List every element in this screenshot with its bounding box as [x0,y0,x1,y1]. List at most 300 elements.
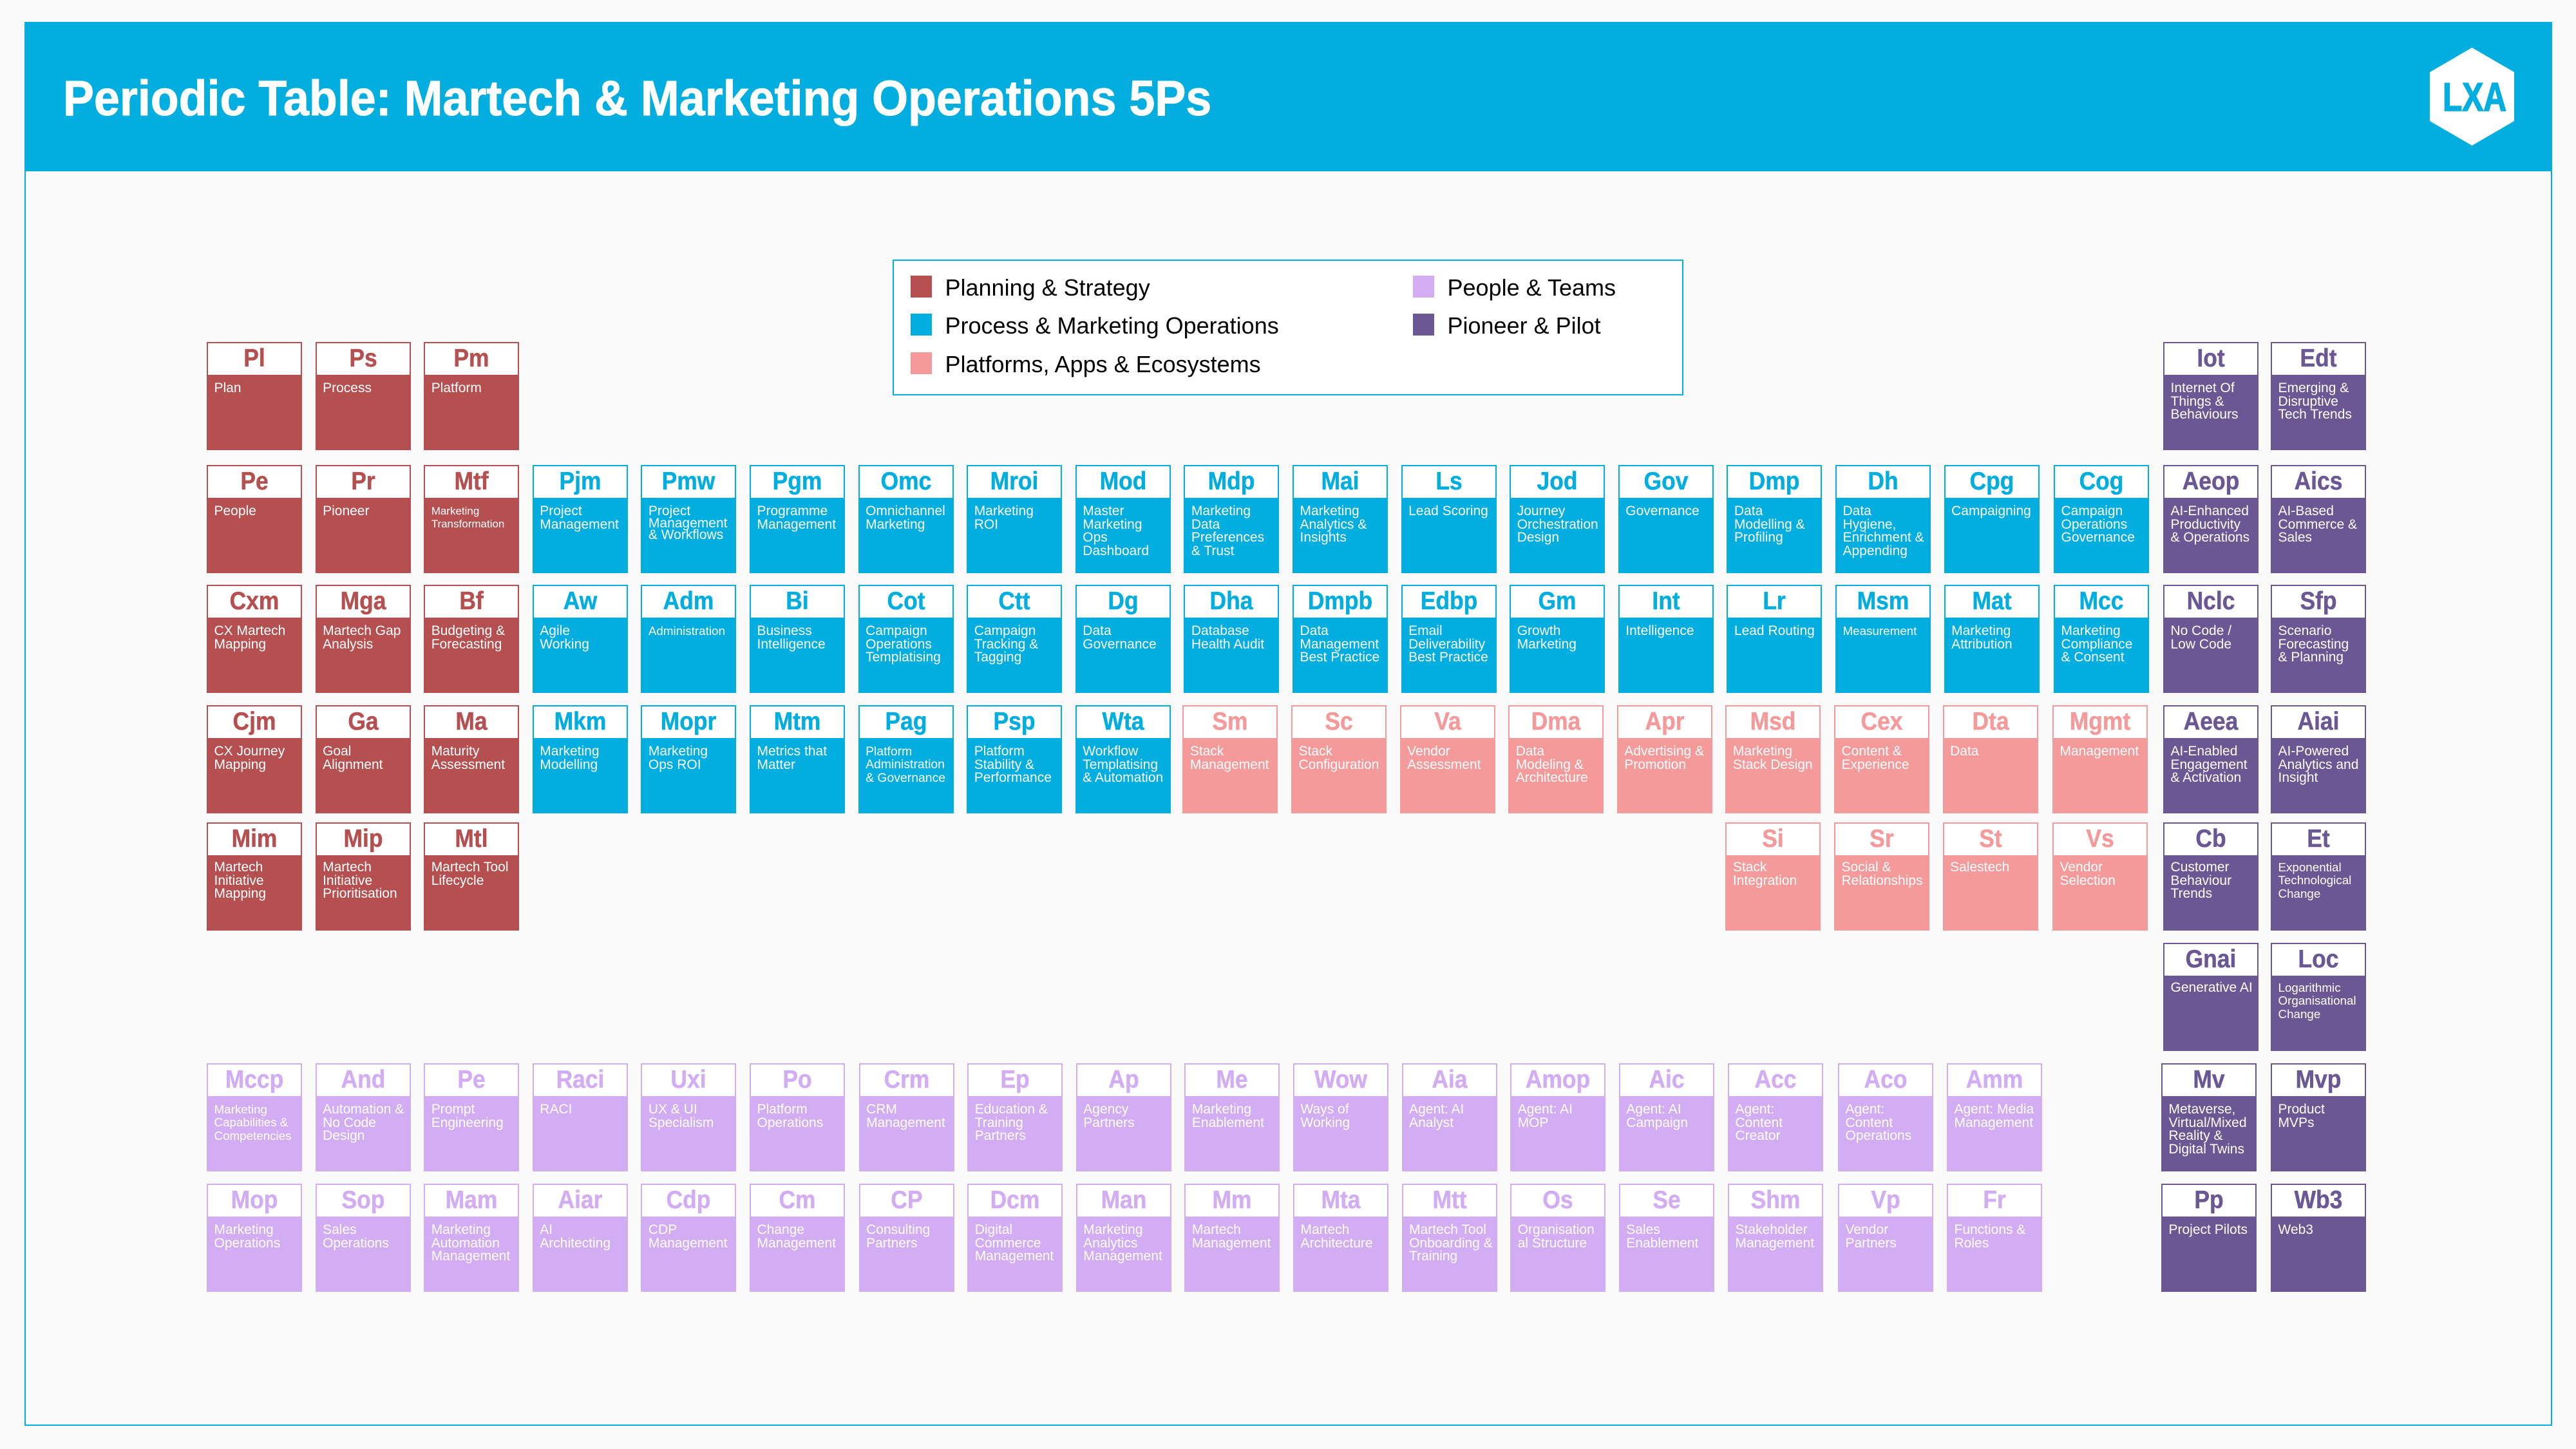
element: Cm: Change [757,1222,804,1237]
element: Mdp [1184,465,1279,573]
legend item: Pioneer & Pilot [1413,312,1601,339]
element: Sfp [2271,585,2366,693]
element: Mccp [207,1063,302,1171]
element: Sfp: Forecasting [2278,636,2349,652]
element: Cb: Cb [2195,825,2226,853]
element: Dmp: Modelling & [1734,516,1805,532]
element: Os: Os [1543,1186,1573,1214]
element: Mta: Architecture [1301,1235,1373,1251]
element: Mtt: Training [1409,1249,1457,1264]
element: Dcm: Commerce [975,1235,1041,1251]
element: Crm: Crm [884,1066,929,1094]
element: Loc [2271,943,2366,1051]
element: Po: Platform [757,1102,808,1117]
element: Mip: Mip [343,825,383,853]
element: Nclc: No Code / [2170,623,2231,638]
element: Mv: Mv [2193,1066,2225,1094]
element: Adm: Adm [663,587,714,615]
element: Omc: Omc [880,468,931,495]
element: Pm [424,342,519,450]
element: Aiai: Aiai [2298,708,2339,735]
element: Raci [533,1063,628,1171]
legend panel: Pioneer & Pilot [1448,312,1601,339]
element: Mip: Initiative [323,873,372,887]
element: Mai: Analytics & [1300,516,1367,532]
element: Dma: Modeling & [1516,757,1584,772]
element: Mtf: Mtf [455,468,489,495]
element: Dmpb: Data [1300,623,1329,638]
element: Cot: Operations [866,636,932,652]
legend item: Planning & Strategy [911,274,1150,300]
element: Aia [1402,1063,1497,1171]
element: Sm [1182,705,1278,813]
element: Dta: Dta [1972,708,2009,735]
element: Shm: Shm [1751,1186,1800,1214]
element: Sm: Sm [1213,708,1248,735]
element: Dta [1943,705,2038,813]
element: Sfp: Sfp [2300,587,2337,615]
element: Dmp [1727,465,1822,573]
element: Dha: Dha [1210,587,1253,615]
element: Pl: Plan [214,381,242,395]
element: Dg: Data [1083,623,1112,638]
element: Mopr: Marketing [649,744,708,759]
element: Mcc: & Consent [2061,650,2125,665]
element: Mvp: MVPs [2278,1115,2315,1130]
element: Dha: Database [1191,623,1249,638]
element: Dma: Architecture [1516,770,1588,785]
element: Ctt: Tagging [974,650,1021,665]
element: Mtm: Mtm [774,708,820,735]
element: Loc: Change [2278,1007,2320,1020]
element: Shm [1728,1184,1823,1292]
element: Ma: Maturity [431,744,479,759]
element: Ma: Assessment [431,757,505,772]
element: And [316,1063,411,1171]
element: Mccp: Marketing [214,1103,267,1115]
element: Dma [1508,705,1604,813]
element: Pmw: & Workflows [649,527,723,542]
element: Ap: Ap [1108,1066,1139,1094]
element: Pgm [750,465,845,573]
element: Crm: CRM [866,1102,897,1117]
element: Acc: Creator [1735,1128,1781,1143]
element: Msm: Measurement [1843,623,1917,638]
element: Wb3 [2271,1184,2366,1292]
element: Gov: Gov [1643,468,1688,495]
element: Edt: Disruptive [2278,394,2338,408]
element: Acc: Agent: [1735,1102,1774,1117]
element: Si: Si [1763,825,1784,853]
element: Psp [967,705,1062,813]
element: Loc: Organisational [2278,994,2356,1007]
element: Pgm: Management [757,516,836,532]
element: Edbp: Best Practice [1408,650,1488,665]
element: Cb: Customer [2170,860,2230,875]
element: CP [859,1184,954,1292]
element: Dcm: Digital [975,1222,1012,1237]
legend panel: People & Teams [1448,274,1616,300]
element: Pp [2161,1184,2257,1292]
element: Dmpb [1293,585,1388,693]
element: Man: Man [1101,1186,1146,1214]
element: Uxi: Specialism [649,1115,714,1130]
element: Pmw [641,465,736,573]
title: Periodic Table: Martech & Marketing Operations 5Ps [63,71,1211,126]
legend panel: Platforms, Apps & Ecosystems [945,350,1261,377]
element: Mga: Analysis [323,636,373,652]
element: Iot: Behaviours [2170,407,2239,422]
element: Sop [316,1184,411,1292]
element: Mv: Digital Twins [2169,1141,2244,1157]
element: Pm: Pm [454,345,489,372]
element: Lr: Lead Routing [1734,623,1815,638]
element: Msm: Msm [1857,587,1909,615]
element: Cex: Content & [1842,744,1902,759]
element: Apr [1617,705,1712,813]
element: Mtf: Transformation [431,518,504,529]
element: Wta: Workflow [1083,744,1138,759]
element: Adm: Administration [649,623,725,638]
element: Nclc: Low Code [2170,636,2231,652]
element: Iot: Internet Of [2170,381,2235,395]
element: Pjm [533,465,628,573]
element: Va: Va [1434,708,1461,735]
element: Vp: Partners [1846,1235,1897,1251]
element: Dma: Dma [1531,708,1581,735]
element: Msd: Stack Design [1733,757,1813,772]
element: Mtl [424,822,519,931]
element: Sc: Stack [1298,744,1332,759]
element: Ma: Ma [456,708,488,735]
element: Ma [424,705,519,813]
element: Msm [1835,585,1931,693]
element: Pmw: Management [649,515,727,531]
element: Sr: Relationships [1842,873,1923,887]
element: Edt [2271,342,2366,450]
element: Mat [1944,585,2040,693]
element: Dh: Dh [1868,468,1899,495]
element: Mkm: Modelling [540,757,598,772]
element: CP: Partners [866,1235,917,1251]
element: Mm: Martech [1192,1222,1241,1237]
element: St [1943,822,2038,931]
element: Cpg [1944,465,2040,573]
element: Bf: Budgeting & [431,623,505,638]
element: Mroi: Marketing [974,504,1034,518]
element: Aia: Agent: AI [1409,1102,1464,1117]
element: Ctt: Tracking & [974,636,1038,652]
element: CP: Consulting [866,1222,930,1237]
element: Mim [207,822,302,931]
element: Vs: Vendor [2060,860,2103,875]
element: Ga [316,705,411,813]
element: Mod: Mod [1099,468,1146,495]
element: Sc: Configuration [1298,757,1379,772]
element: Aw: Working [540,636,589,652]
element: Cog: Campaign [2061,504,2123,518]
element: Dmp: Profiling [1734,530,1783,545]
element: Ctt: Ctt [999,587,1030,615]
element: Ga: Goal [323,744,351,759]
element: Fr: Functions & [1954,1222,2025,1237]
element: Apr: Promotion [1624,757,1686,772]
element: Mccp: Competencies [214,1128,292,1142]
legend item: Platforms, Apps & Ecosystems [911,350,1261,377]
element: Jod [1510,465,1605,573]
element: Mip: Martech [323,860,372,875]
element: Cjm [207,705,302,813]
element: Wow: Wow [1314,1066,1367,1094]
element: Aeop: AI-Enhanced [2170,504,2249,518]
element: Wta: Wta [1102,708,1144,735]
element: Amm: Management [1954,1115,2033,1130]
element: Po [750,1063,845,1171]
element: Vs: Selection [2060,873,2116,887]
element: Amm [1947,1063,2042,1171]
element: Aia: Aia [1432,1066,1467,1094]
element: Sm: Management [1190,757,1269,772]
element: Aco: Operations [1846,1128,1911,1143]
element: Sop: Sales [323,1222,357,1237]
element: Pl [207,342,302,450]
element: Wb3: Web3 [2278,1222,2313,1237]
element: Amm: Amm [1966,1066,2023,1094]
element: Crm [859,1063,954,1171]
element: Edbp: Email [1408,623,1443,638]
element: Mam: Marketing [431,1222,491,1237]
element: Amop: MOP [1518,1115,1549,1130]
element: Crm: Management [866,1115,945,1130]
element: Po: Operations [757,1115,823,1130]
element: Mtt [1402,1184,1497,1292]
element: Cot: Campaign [866,623,927,638]
element: Dcm [967,1184,1063,1292]
element: Mgmt: Management [2060,744,2139,759]
element: Pjm: Pjm [559,468,601,495]
element: Ap: Agency [1083,1102,1128,1117]
element: Mdp: Preferences [1191,530,1264,545]
element: Cb: Trends [2170,886,2212,901]
element: Sr: Social & [1842,860,1891,875]
element: Mccp: Mccp [225,1066,283,1094]
element: Mvp [2271,1063,2366,1171]
element: Mm [1184,1184,1280,1292]
element: Ap: Partners [1083,1115,1135,1130]
element: Mvp: Mvp [2296,1066,2341,1094]
element: Cog [2054,465,2149,573]
element: Ep [967,1063,1063,1171]
element: Mim: Mim [232,825,277,853]
element: Gm: Marketing [1517,636,1577,652]
element: Sfp: & Planning [2278,650,2344,665]
element: Pe [207,465,302,573]
element: Pjm: Project [540,504,582,518]
element: Ep: Partners [975,1128,1026,1143]
element: Edt: Edt [2300,345,2337,372]
element: Mdp: & Trust [1191,544,1234,558]
element: Mop: Mop [231,1186,278,1214]
element: Pe: People [214,504,256,518]
element: Cpg: Cpg [1969,468,2014,495]
element: Aics: Sales [2278,530,2312,545]
element: Aics: Commerce & [2278,516,2357,532]
element: Mga [316,585,411,693]
element: Psp: Performance [974,770,1052,785]
element: Aiai: Insight [2278,770,2318,785]
element: Aeea [2163,705,2259,813]
element: Mta: Martech [1301,1222,1349,1237]
element: Apr: Advertising & [1624,744,1704,759]
element: Acc: Acc [1754,1066,1796,1094]
element: Aics: Aics [2295,468,2342,495]
element: And: Automation & [323,1102,404,1117]
element: Aeea: Aeea [2184,708,2238,735]
element: Vs [2052,822,2148,931]
element: Et: Exponential [2278,860,2342,873]
element: Mroi [967,465,1062,573]
element: Cex: Cex [1861,708,1902,735]
element: Fr [1947,1184,2042,1292]
element: Dha [1184,585,1279,693]
element: Cxm: Mapping [214,636,266,652]
element: Aiar: AI [540,1222,553,1237]
element: Mcc [2054,585,2149,693]
element: Jod: Design [1517,530,1559,545]
element: And: No Code [323,1115,376,1130]
element: Os: Organisation [1518,1222,1595,1237]
element: Aia: Analyst [1409,1115,1454,1130]
element: Bf: Bf [460,587,484,615]
element: Iot: Iot [2197,345,2225,372]
element: Aw [533,585,628,693]
element: Os [1510,1184,1605,1292]
element: Cot: Templatising [866,650,941,665]
element: Aeop: Aeop [2183,468,2239,495]
element: Aw: Agile [540,623,570,638]
element: Fr: Roles [1954,1235,1989,1251]
element: Dh [1835,465,1931,573]
element: Dma: Data [1516,744,1544,759]
element: Mvp: Product [2278,1102,2325,1117]
element: Dha: Health Audit [1191,636,1264,652]
element: Aeop: Productivity [2170,516,2240,532]
element: Aeop [2163,465,2259,573]
element: Mtm: Metrics that [757,744,827,759]
element: Vp [1838,1184,1933,1292]
element: Bi [750,585,845,693]
element: Dg: Governance [1083,636,1157,652]
element: Aco: Agent: [1846,1102,1884,1117]
element: Pmw: Project [649,504,690,518]
element: Mcc: Marketing [2061,623,2121,638]
element: Edbp [1401,585,1497,693]
element: Mod: Master [1083,504,1124,518]
element: Vp: Vendor [1846,1222,1888,1237]
element: Dmpb: Dmpb [1308,587,1372,615]
element: Wow: Ways of [1301,1102,1349,1117]
element: Mam: Automation [431,1235,500,1251]
element: Cjm: Mapping [214,757,266,772]
element: Mta [1293,1184,1388,1292]
element: Ga: Alignment [323,757,383,772]
element: Amop [1510,1063,1605,1171]
element: Lr: Lr [1763,587,1786,615]
element: Gov: Governance [1625,504,1700,518]
element: Aco [1838,1063,1933,1171]
element: Pag: Administration [866,757,945,772]
element: Omc: Marketing [866,516,925,532]
element: Bi: Bi [786,587,809,615]
element: Wow: Working [1301,1115,1350,1130]
element: Apr: Apr [1645,708,1684,735]
element: Pgm: Pgm [773,468,822,495]
element: Aeop: & Operations [2170,530,2249,545]
element: Mga: Martech Gap [323,623,401,638]
element: Bf: Forecasting [431,636,502,652]
element: Mta: Mta [1321,1186,1361,1214]
element: Aco: Content [1846,1115,1893,1130]
element: Mm: Management [1192,1235,1271,1251]
element: Aic: Aic [1649,1066,1684,1094]
element: Aics [2271,465,2366,573]
element: Mga: Mga [340,587,386,615]
element: Cog: Cog [2079,468,2123,495]
element: Pl: Pl [243,345,265,372]
element: Mim: Martech [214,860,263,875]
element: Et: Technological [2278,873,2351,887]
element: Va: Assessment [1407,757,1481,772]
element: Mod: Ops [1083,530,1108,545]
element: Va: Vendor [1407,744,1450,759]
element: Pr [316,465,411,573]
element: Cxm [207,585,302,693]
element: Mop: Operations [214,1235,280,1251]
element: Vs: Vs [2086,825,2114,853]
element: Aiai [2271,705,2366,813]
element: Cog: Operations [2061,516,2127,532]
element: Edbp: Deliverability [1408,636,1485,652]
element: Mat: Attribution [1951,636,2012,652]
element: Mtl: Lifecycle [431,873,484,887]
element: Shm: Stakeholder [1735,1222,1808,1237]
element: Cxm: CX Martech [214,623,285,638]
element: Ls: Ls [1435,468,1462,495]
element: Pm: Platform [431,381,482,395]
element: Sc: Sc [1325,708,1353,735]
element: Mcc: Mcc [2079,587,2123,615]
element: Cdp: CDP [649,1222,677,1237]
element: Mtm [750,705,845,813]
element: Mdp: Mdp [1208,468,1255,495]
element: Dg [1075,585,1171,693]
element: Ls: Lead Scoring [1408,504,1488,518]
element: Mtf: Marketing [431,505,479,516]
element: Nclc [2163,585,2259,693]
element: Aiar: Architecting [540,1235,611,1251]
element: Sr: Sr [1870,825,1894,853]
element: Cm [750,1184,845,1292]
element: Jod: Jod [1537,468,1578,495]
element: Gnai: Generative AI [2170,980,2253,995]
element: And: Design [323,1128,365,1143]
element: Ga: Ga [348,708,378,735]
element: Gov [1618,465,1714,573]
element: Cdp: Cdp [667,1186,711,1214]
header banner [24,22,2552,171]
element: Mtt: Mtt [1432,1186,1466,1214]
element: Mat: Marketing [1951,623,2011,638]
